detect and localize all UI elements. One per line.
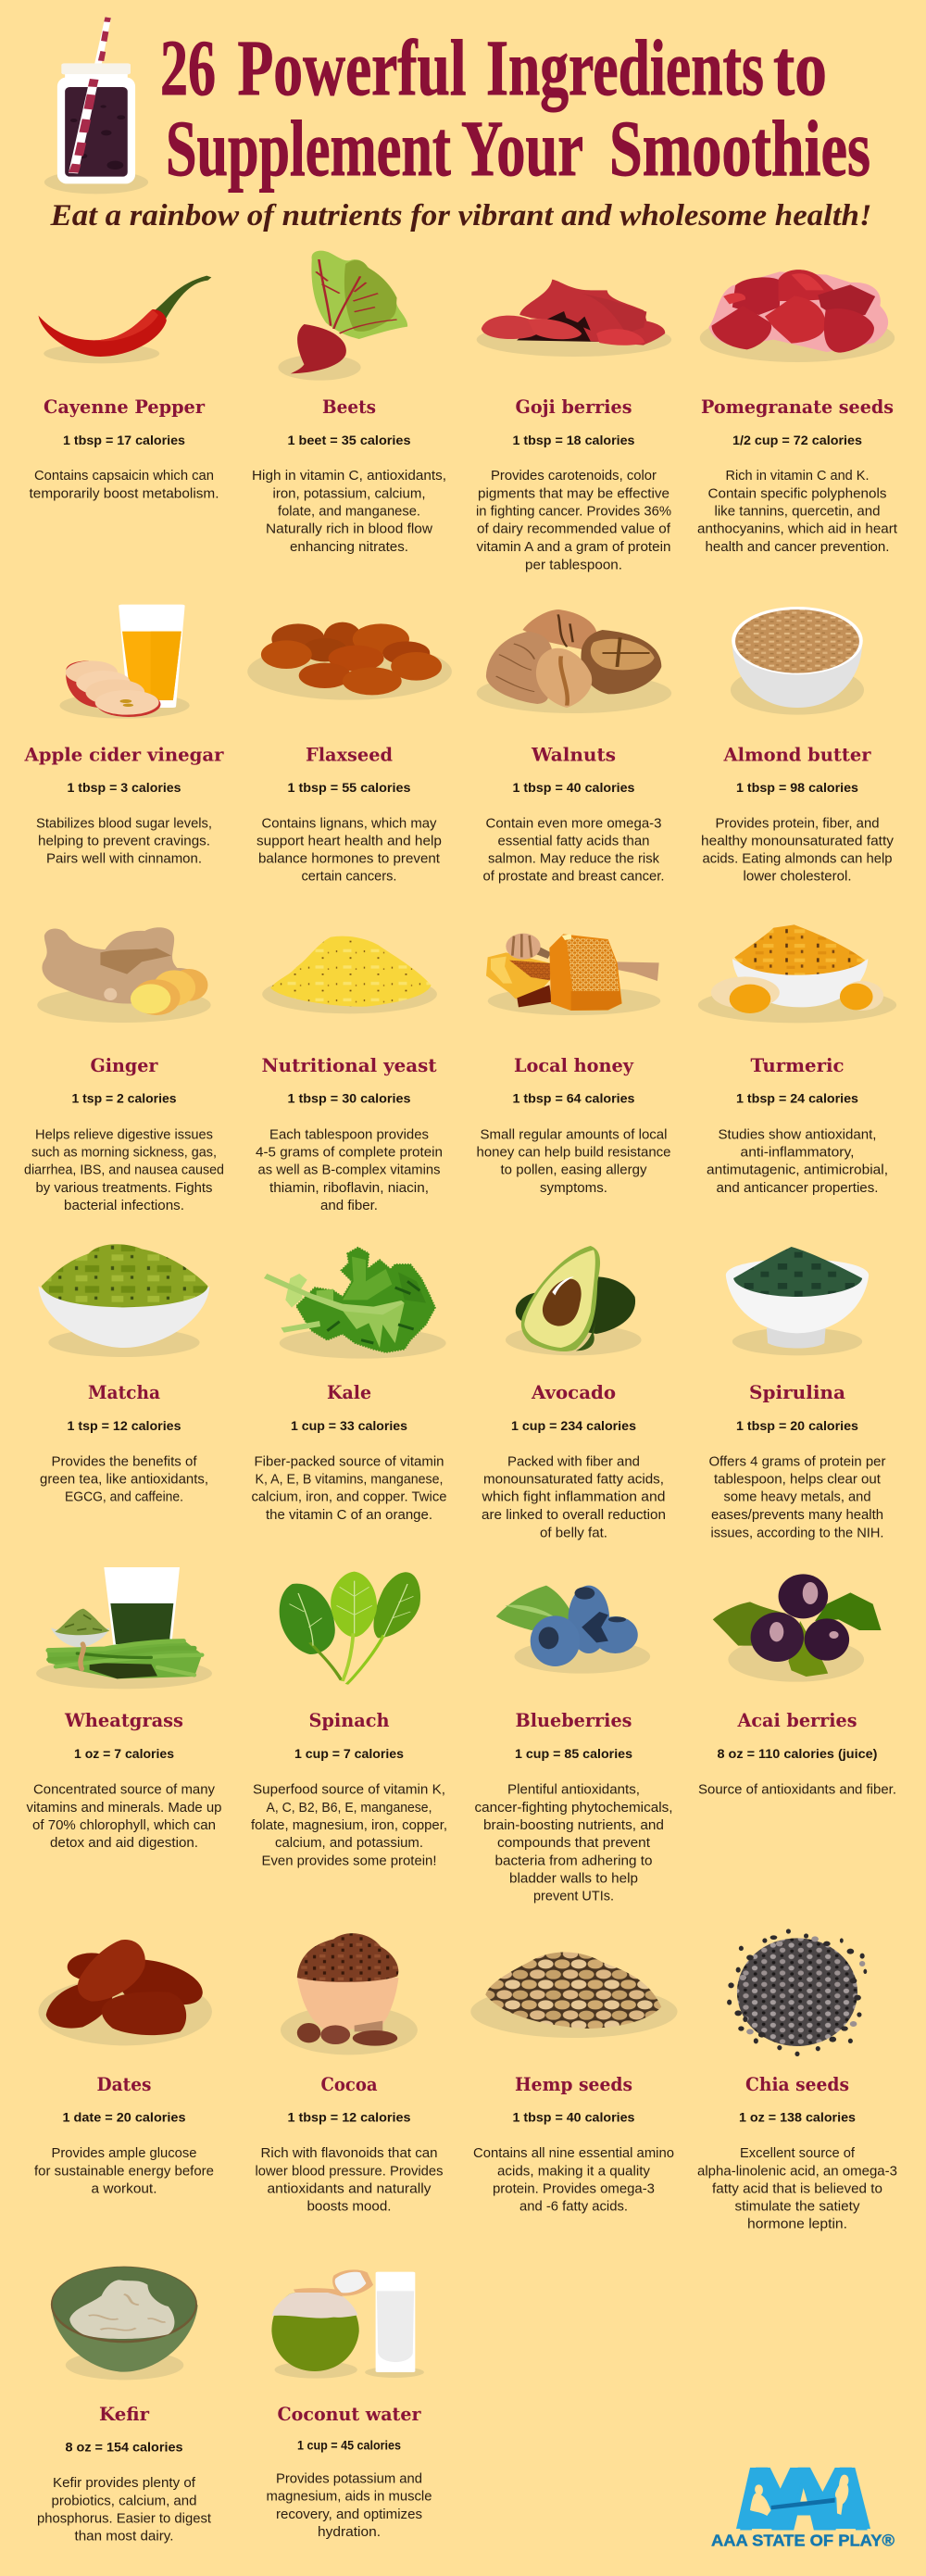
description: lower cholesterol. — [743, 870, 852, 885]
subtitle: Eat a rainbow of nutrients for vibrant and wholesome health! — [49, 199, 872, 232]
description — [40, 1454, 208, 1505]
description: salmon. May reduce the risk — [488, 852, 660, 867]
description: as well as B-complex vitamins — [257, 1163, 441, 1178]
description: monounsaturated fatty acids, — [483, 1473, 664, 1488]
title: Supplement — [166, 104, 451, 193]
description: balance hormones to prevent — [258, 852, 440, 867]
description: EGCG, and caffeine. — [65, 1490, 183, 1505]
panel: spinach — [251, 1572, 447, 1868]
description: per tablespoon. — [525, 558, 622, 572]
description: bladder walls to help — [509, 1872, 638, 1887]
heading: Walnuts — [531, 745, 616, 766]
heading: Spinach — [309, 1710, 389, 1731]
description: Contains capsaicin which can — [34, 469, 214, 484]
calories: 1 cup = 45 calories — [297, 2439, 401, 2453]
description: which fight inflammation and — [481, 1490, 665, 1505]
heading: Ginger — [91, 1055, 158, 1076]
description: hydration. — [318, 2525, 381, 2540]
description: Stabilizes blood sugar levels, — [36, 816, 212, 831]
description: temporarily boost metabolism. — [30, 487, 219, 502]
description: Kefir provides plenty of — [53, 2476, 196, 2491]
description: diarrhea, IBS, and nausea caused — [24, 1163, 224, 1178]
icon: beet — [278, 251, 407, 381]
description — [707, 1127, 888, 1196]
description: to pollen, easing allergy — [500, 1163, 647, 1178]
calories: 1 cup = 234 calories — [511, 1419, 636, 1433]
calories: 8 oz = 154 calories — [65, 2441, 183, 2455]
description: acids. Eating almonds can help — [702, 852, 893, 867]
description: prevent UTIs. — [533, 1890, 614, 1904]
description: bacterial infections. — [64, 1199, 184, 1213]
description: Provides the benefits of — [52, 1454, 197, 1469]
calories: 1 date = 20 calories — [63, 2111, 185, 2125]
panel: pomegranate seeds — [697, 270, 897, 555]
description — [30, 469, 219, 502]
calories: 1 oz = 138 calories — [739, 2111, 856, 2125]
description: stimulate the satiety — [735, 2200, 860, 2215]
description: are linked to overall reduction — [482, 1508, 666, 1523]
description: and anticancer properties. — [717, 1181, 878, 1196]
description: healthy monounsaturated fatty — [701, 835, 895, 849]
description: Small regular amounts of local — [480, 1127, 667, 1142]
icon: pomegranate seeds — [700, 270, 895, 362]
title: Powerful — [237, 23, 467, 112]
heading: Local honey — [514, 1055, 634, 1076]
description: eases/prevents many health — [711, 1508, 883, 1523]
panel: turmeric — [698, 924, 896, 1196]
icon: ginger root — [37, 927, 211, 1023]
icon: blueberries — [496, 1586, 650, 1674]
description: issues, according to the NIH. — [711, 1526, 883, 1540]
heading: Avocado — [531, 1382, 616, 1403]
icon: bowl of matcha — [38, 1244, 209, 1357]
description — [697, 469, 897, 555]
description: for sustainable energy before — [34, 2164, 214, 2179]
description: High in vitamin C, antioxidants, — [252, 469, 446, 484]
description — [256, 1127, 443, 1213]
calories: 1 tbsp = 30 calories — [287, 1092, 411, 1106]
panel: nutritional yeast — [256, 936, 443, 1213]
description — [701, 816, 895, 885]
calories: 1 tbsp = 12 calories — [287, 2111, 411, 2125]
panel: walnuts — [477, 609, 671, 885]
description: detox and aid digestion. — [50, 1836, 198, 1851]
panel: hemp seeds — [470, 1952, 678, 2215]
icon: chia seed scatter — [727, 1929, 867, 2056]
description: Pairs well with cinnamon. — [46, 852, 202, 867]
panel: blueberries — [474, 1586, 672, 1904]
description: folate, magnesium, iron, copper, — [251, 1818, 447, 1833]
calories: 1 tbsp = 40 calories — [513, 2111, 635, 2125]
description: bacteria from adhering to — [494, 1853, 652, 1868]
heading: Cayenne Pepper — [44, 396, 206, 418]
description: Provides carotenoids, color — [491, 469, 657, 484]
description — [24, 1127, 224, 1213]
description: boosts mood. — [307, 2200, 391, 2215]
panel: apple cider vinegar — [23, 605, 224, 867]
calories: 1 tsp = 12 calories — [67, 1419, 181, 1433]
calories: 1 tbsp = 64 calories — [513, 1092, 635, 1106]
heading: Apple cider vinegar — [23, 745, 224, 766]
description — [474, 1783, 672, 1904]
icon: spinach leaves — [280, 1572, 420, 1684]
description: Source of antioxidants and fiber. — [698, 1783, 896, 1798]
title: 26 — [160, 23, 216, 112]
description: enhancing nitrates. — [290, 540, 408, 555]
description — [483, 816, 665, 885]
description: support heart health and help — [257, 835, 442, 849]
heading: Goji berries — [515, 396, 632, 418]
description: such as morning sickness, gas, — [31, 1146, 217, 1161]
description: of prostate and breast cancer. — [483, 870, 665, 885]
panel: cocoa — [256, 1933, 443, 2215]
description — [252, 469, 446, 555]
description: and -6 fatty acids. — [519, 2200, 628, 2215]
heading: Nutritional yeast — [261, 1055, 437, 1076]
title: Your — [461, 104, 583, 193]
description: Rich with flavonoids that can — [261, 2146, 437, 2161]
description: phosphorus. Easier to digest — [37, 2512, 211, 2527]
description: Helps relieve digestive issues — [35, 1127, 213, 1142]
description — [34, 2146, 214, 2196]
heading: Coconut water — [278, 2404, 421, 2425]
description: green tea, like antioxidants, — [40, 1473, 208, 1488]
heading: Kale — [327, 1382, 371, 1403]
description: K, A, E, B vitamins, manganese, — [256, 1473, 443, 1488]
panel: almond butter — [701, 607, 895, 885]
heading: Chia seeds — [745, 2074, 849, 2095]
description: Concentrated source of many — [33, 1783, 216, 1798]
description — [709, 1454, 886, 1540]
description: Contain even more omega-3 — [485, 816, 661, 831]
icon: avocado halves — [506, 1246, 642, 1355]
description: Contains all nine essential amino — [473, 2146, 674, 2161]
title — [160, 23, 870, 193]
icon: kale leaf — [264, 1248, 446, 1359]
description: of 70% chlorophyll, which can — [32, 1818, 216, 1833]
description: and fiber. — [320, 1199, 378, 1213]
description: calcium, iron, and copper. Twice — [252, 1490, 446, 1505]
description: anthocyanins, which aid in heart — [697, 522, 897, 537]
calories: 1 beet = 35 calories — [287, 434, 411, 447]
calories: 1 tbsp = 3 calories — [67, 781, 181, 795]
icon: dates — [38, 1940, 212, 2045]
description — [476, 469, 671, 572]
description: essential fatty acids than — [498, 835, 650, 849]
description: fatty acid that is believed to — [712, 2181, 882, 2196]
description: antioxidants and naturally — [267, 2181, 432, 2196]
calories: 1 tbsp = 24 calories — [736, 1092, 858, 1106]
heading: Beets — [322, 396, 376, 418]
description: 4-5 grams of complete protein — [256, 1146, 443, 1161]
description: by various treatments. Fights — [35, 1181, 213, 1196]
calories: 8 oz = 110 calories (juice) — [717, 1747, 878, 1761]
description — [252, 1454, 446, 1523]
calories: 1 tbsp = 55 calories — [287, 781, 411, 795]
icon: bowl of kefir — [51, 2267, 198, 2380]
panel: local honey — [476, 934, 670, 1196]
heading: Almond butter — [723, 745, 871, 766]
panel: ginger — [24, 927, 224, 1213]
icon: bowl of almond butter — [731, 607, 864, 715]
description: alpha-linolenic acid, an omega-3 — [697, 2164, 897, 2179]
calories: 1/2 cup = 72 calories — [732, 434, 862, 447]
icon: bowl of spirulina — [726, 1247, 869, 1355]
description: calcium, and potassium. — [275, 1836, 423, 1851]
description: Naturally rich in blood flow — [266, 522, 433, 537]
calories: 1 tbsp = 20 calories — [736, 1419, 858, 1433]
description: A, C, B2, B6, E, manganese, — [267, 1801, 432, 1816]
description: Excellent source of — [740, 2146, 856, 2161]
icon: hemp seed pile — [470, 1952, 678, 2038]
calories: 1 tsp = 2 calories — [72, 1092, 176, 1106]
calories: 1 oz = 7 calories — [74, 1747, 174, 1761]
panel: avocado — [481, 1246, 666, 1540]
title: Ingredients — [486, 23, 764, 112]
description: the vitamin C of an orange. — [266, 1508, 432, 1523]
description: Provides potassium and — [276, 2472, 422, 2487]
icon: vinegar glass and apple slices — [59, 605, 190, 719]
description: like tannins, quercetin, and — [715, 505, 880, 520]
description: lower blood pressure. Provides — [256, 2164, 443, 2179]
description: cancer-fighting phytochemicals, — [474, 1801, 672, 1816]
heading: Wheatgrass — [64, 1710, 183, 1731]
description: protein. Provides omega-3 — [493, 2181, 655, 2196]
logo: AAA State of Play: AAA STATE OF PLAY® — [711, 2532, 895, 2550]
panel: coconut water — [267, 2269, 432, 2540]
description — [36, 816, 212, 867]
heading: Flaxseed — [306, 745, 393, 766]
description: folate, and manganese. — [278, 505, 420, 520]
panel: acai berries — [698, 1574, 896, 1798]
description: than most dairy. — [74, 2530, 174, 2545]
description: anti-inflammatory, — [741, 1146, 854, 1161]
panel: kefir — [37, 2267, 211, 2545]
panel: flaxseed — [247, 622, 452, 885]
description: Offers 4 grams of protein per — [709, 1454, 886, 1469]
description: health and cancer prevention. — [706, 540, 889, 555]
panel: kale — [252, 1248, 446, 1523]
description: of belly fat. — [540, 1526, 607, 1540]
calories: 1 tbsp = 40 calories — [513, 781, 635, 795]
icon: wheatgrass juice and bundle — [36, 1567, 212, 1689]
title: to — [773, 23, 827, 112]
description: Provides protein, fiber, and — [715, 816, 880, 831]
icon: flaxseed pile — [247, 622, 452, 700]
description: some heavy metals, and — [724, 1490, 870, 1505]
heading: Kefir — [99, 2404, 150, 2425]
description — [26, 1783, 222, 1851]
description: Plentiful antioxidants, — [507, 1783, 640, 1798]
description: antimutagenic, antimicrobial, — [707, 1163, 888, 1178]
description — [481, 1454, 666, 1540]
description: Provides ample glucose — [52, 2146, 196, 2161]
description: acids, making it a quality — [497, 2164, 651, 2179]
description — [251, 1783, 447, 1868]
logo: AAA State of Play: AAA — [741, 2453, 867, 2546]
description: Contain specific polyphenols — [707, 487, 887, 502]
heading: Blueberries — [515, 1710, 632, 1731]
description: in fighting cancer. Provides 36% — [476, 505, 671, 520]
icon: coconut and glass — [271, 2269, 424, 2379]
panel: dates — [34, 1940, 214, 2196]
description: helping to prevent cravings. — [38, 835, 210, 849]
panel: spirulina — [709, 1247, 886, 1540]
description: Contains lignans, which may — [261, 816, 437, 831]
description — [267, 2472, 432, 2540]
heading: Hemp seeds — [515, 2074, 632, 2095]
description: Each tablespoon provides — [269, 1127, 429, 1142]
panel: matcha — [38, 1244, 209, 1505]
icon: walnuts — [477, 609, 671, 713]
heading: Dates — [96, 2074, 152, 2095]
description: symptoms. — [540, 1181, 607, 1196]
description: tablespoon, helps clear out — [714, 1473, 881, 1488]
description: vitamin A and a gram of protein — [476, 540, 670, 555]
panel: goji berries — [476, 280, 671, 572]
icon: chili pepper — [38, 276, 211, 363]
description — [476, 1127, 670, 1196]
panel: wheatgrass — [26, 1567, 222, 1851]
panel: cayenne pepper — [30, 276, 219, 502]
heading: Acai berries — [737, 1710, 857, 1731]
calories: 1 cup = 85 calories — [515, 1747, 632, 1761]
description — [257, 816, 442, 885]
description: Superfood source of vitamin K, — [253, 1783, 445, 1798]
icon: honeycomb and dipper — [486, 934, 660, 1015]
calories: 1 tbsp = 98 calories — [736, 781, 858, 795]
heading: Turmeric — [750, 1055, 845, 1076]
icon: smoothie jar with straw — [44, 17, 148, 194]
description: brain-boosting nutrients, and — [483, 1818, 664, 1833]
calories: 1 tbsp = 17 calories — [63, 434, 185, 447]
calories: 1 tbsp = 18 calories — [513, 434, 635, 447]
description: certain cancers. — [302, 870, 396, 885]
description — [256, 2146, 443, 2215]
description: compounds that prevent — [497, 1836, 650, 1851]
description: vitamins and minerals. Made up — [26, 1801, 222, 1816]
calories: 1 cup = 7 calories — [294, 1747, 404, 1761]
heading: Matcha — [88, 1382, 160, 1403]
calories: 1 cup = 33 calories — [291, 1419, 407, 1433]
description: thiamin, riboflavin, niacin, — [269, 1181, 429, 1196]
icon: cocoa cup and beans — [281, 1933, 418, 2055]
panel: chia seeds — [697, 1929, 897, 2232]
description: Studies show antioxidant, — [719, 1127, 876, 1142]
description: magnesium, aids in muscle — [267, 2490, 432, 2505]
description — [697, 2146, 897, 2232]
description — [473, 2146, 674, 2215]
description: Even provides some protein! — [261, 1853, 437, 1868]
description: hormone leptin. — [747, 2218, 847, 2232]
heading: Cocoa — [320, 2074, 378, 2095]
description: iron, potassium, calcium, — [272, 487, 426, 502]
description: probiotics, calcium, and — [52, 2494, 196, 2508]
description: of dairy recommended value of — [477, 522, 671, 537]
description: Fiber-packed source of vitamin — [254, 1454, 444, 1469]
description — [37, 2476, 211, 2545]
description: pigments that may be effective — [478, 487, 669, 502]
heading: Pomegranate seeds — [701, 396, 894, 418]
description: recovery, and optimizes — [276, 2507, 422, 2522]
panel: beets — [252, 251, 446, 555]
icon: yeast pile — [262, 936, 437, 1013]
heading: Spirulina — [749, 1382, 845, 1403]
description: Rich in vitamin C and K. — [726, 469, 869, 484]
description: a workout. — [91, 2181, 157, 2196]
description: honey can help build resistance — [476, 1146, 670, 1161]
icon: acai berries — [713, 1574, 882, 1682]
icon: goji berry pile — [477, 280, 671, 357]
description: Packed with fiber and — [507, 1454, 640, 1469]
icon: bowl of turmeric — [698, 924, 896, 1023]
